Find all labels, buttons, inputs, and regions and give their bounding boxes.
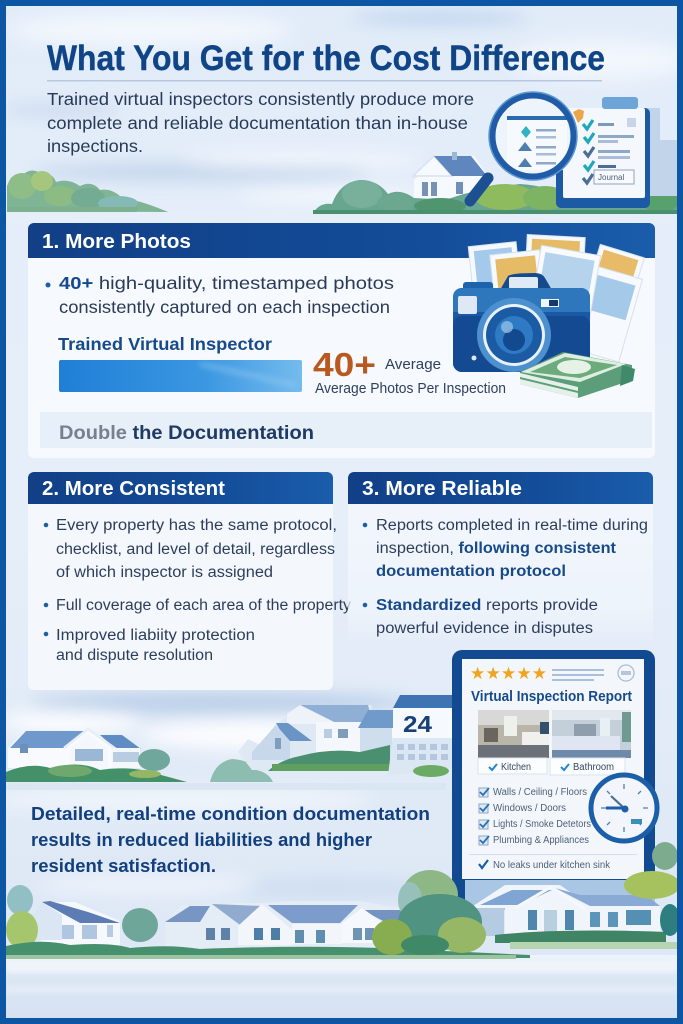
checklist xyxy=(469,787,637,871)
bullet list: documentation protocol xyxy=(376,563,566,580)
photo: bathroom xyxy=(552,710,631,758)
bullet list: powerful evidence in disputes xyxy=(376,620,593,637)
stat 40+: Average Photos Per Inspection xyxy=(315,381,506,397)
photo: kitchen xyxy=(478,710,549,758)
bar label: Trained Virtual Inspector xyxy=(58,334,272,354)
bullet list: and dispute resolution xyxy=(56,647,213,664)
house left xyxy=(32,901,120,945)
bullet list: checklist, and level of detail, regardless xyxy=(56,541,335,558)
closing statement xyxy=(31,803,430,876)
icon: clipboard checklist: Journal xyxy=(598,173,624,182)
icon: photo stack xyxy=(468,235,644,362)
label: bathroom xyxy=(550,758,625,775)
hedge xyxy=(6,931,677,959)
icon: clipboard checklist xyxy=(556,97,650,208)
heading: 1. More Photos xyxy=(42,231,191,253)
closing statement: resident satisfaction. xyxy=(31,855,216,876)
callout strip: Double the Documentation xyxy=(59,423,314,444)
label: kitchen xyxy=(478,758,547,774)
icon: camera xyxy=(453,273,590,372)
icon: magnifying glass xyxy=(470,92,584,201)
checklist: Lights / Smoke Detetors xyxy=(493,819,591,830)
icon: calendar xyxy=(388,695,452,777)
stat 40+ xyxy=(313,346,506,397)
bullet text: consistently captured on each inspection xyxy=(59,297,390,317)
bullet list xyxy=(44,517,351,664)
tree left xyxy=(6,885,158,949)
bullet text xyxy=(46,273,394,317)
bullet list: of which inspector is assigned xyxy=(56,564,273,581)
report title: Virtual Inspection Report xyxy=(471,689,632,705)
panel: 1. More Photos xyxy=(28,223,655,458)
left trees xyxy=(7,170,168,212)
bullet list: Every property has the same protocol, xyxy=(56,517,337,534)
bullet list: Standardized reports provide xyxy=(376,597,598,614)
label: bathroom: Bathroom xyxy=(573,762,614,773)
right trees xyxy=(313,180,680,214)
panel: report tablet xyxy=(452,650,657,900)
intro text: Trained virtual inspectors consistently produce more xyxy=(47,89,474,109)
bullet list: Improved liabiity protection xyxy=(56,627,255,644)
callout strip xyxy=(40,412,652,448)
bullet text: 40+ high-quality, timestamped photos xyxy=(59,273,394,293)
panel: 2. More Consistent xyxy=(28,472,351,690)
stat 40+: 40+ xyxy=(313,346,376,383)
closing statement: results in reduced liabilities and higher xyxy=(31,829,372,850)
tree and hedge left xyxy=(6,749,273,782)
tree right xyxy=(624,842,680,936)
panel: 3. More Reliable xyxy=(348,472,653,644)
house right xyxy=(465,880,660,936)
star rating: ★★★★★ xyxy=(470,664,547,683)
label: kitchen: Kitchen xyxy=(501,762,531,773)
checklist: No leaks under kitchen sink xyxy=(493,860,611,871)
bullet list: Reports completed in real-time during xyxy=(376,517,648,534)
checklist: Windows / Doors xyxy=(493,803,566,814)
small house xyxy=(413,152,488,198)
bottom ground xyxy=(6,955,677,1018)
stat 40+: Average xyxy=(385,357,441,373)
bullet list: Full coverage of each area of the property xyxy=(56,597,351,614)
closing statement: Detailed, real-time condition documentation xyxy=(31,803,430,824)
bullet list: inspection, following consistent xyxy=(376,540,616,557)
checklist: Walls / Ceiling / Floors xyxy=(493,787,587,798)
icon: stack of cash xyxy=(520,352,635,398)
bar chart xyxy=(59,360,302,392)
house row xyxy=(165,901,404,948)
bullet list xyxy=(363,517,648,637)
icon: calendar: 24 xyxy=(403,711,432,737)
houses centre xyxy=(238,705,394,771)
intro text: inspections. xyxy=(47,136,143,156)
icon: clock xyxy=(591,775,657,841)
building behind clipboard xyxy=(630,108,677,196)
intro text: complete and reliable documentation than in-house xyxy=(47,113,468,133)
top landscape strip xyxy=(6,108,680,225)
middle landscape xyxy=(6,695,452,790)
large tree xyxy=(372,870,486,955)
checklist: Plumbing & Appliances xyxy=(493,835,589,846)
intro text xyxy=(47,89,474,156)
bottom landscape xyxy=(6,842,680,959)
title: What You Get for the Cost Difference xyxy=(47,39,605,78)
house left xyxy=(8,729,141,770)
heading: 3. More Reliable xyxy=(362,478,522,500)
heading: 2. More Consistent xyxy=(42,478,225,500)
